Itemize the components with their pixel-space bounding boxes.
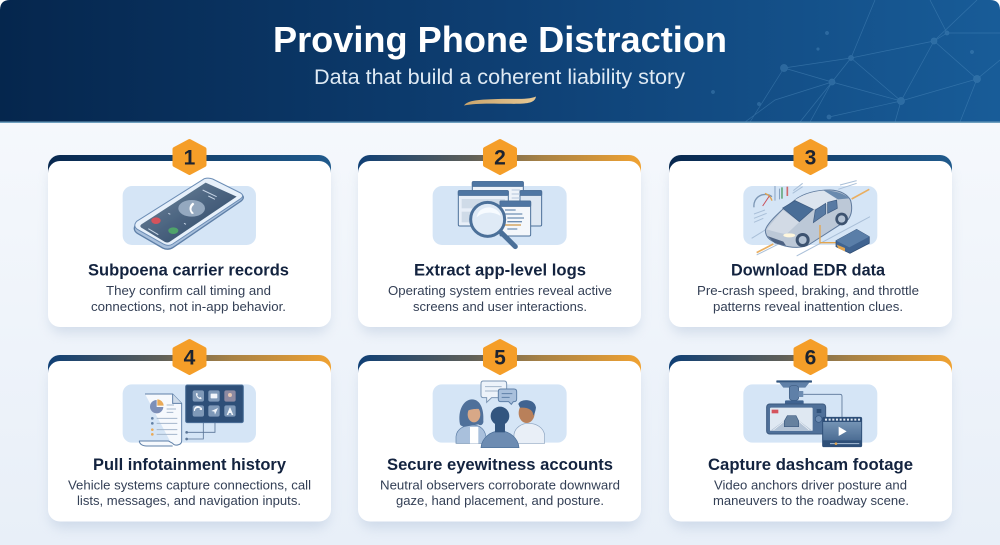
badge 5 (485, 341, 515, 373)
badge 2 (485, 141, 515, 173)
description 6: Video anchors driver posture and (714, 477, 907, 492)
description 6 (713, 477, 909, 508)
heading 5: Secure eyewitness accounts (387, 455, 613, 474)
description 4: lists, messages, and navigation inputs. (77, 493, 301, 508)
description 4 (68, 477, 311, 508)
card 5: secure eyewitness accounts (358, 341, 641, 528)
illustration: document and infotainment screen (123, 384, 256, 446)
description 3: patterns reveal inattention clues. (713, 299, 903, 314)
badge 1: 1 (184, 146, 196, 170)
description 2: screens and user interactions. (413, 299, 587, 314)
description 4: Vehicle systems capture connections, call (68, 477, 311, 492)
illustration: three witnesses (433, 381, 567, 448)
description 2: Operating system entries reveal active (388, 283, 612, 298)
heading 3: Download EDR data (731, 261, 886, 280)
subtitle: Data that build a coherent liability story (314, 66, 686, 89)
description 3: Pre-crash speed, braking, and throttle (697, 283, 919, 298)
illustration: logs and magnifier (433, 182, 567, 247)
description 1: connections, not in-app behavior. (91, 299, 286, 314)
card 4: pull infotainment history (48, 341, 331, 528)
badge 3: 3 (805, 146, 816, 170)
card 6: capture dashcam footage (669, 341, 952, 528)
description 1: They confirm call timing and (106, 283, 271, 298)
heading 6: Capture dashcam footage (708, 455, 913, 474)
badge 5: 5 (494, 346, 506, 370)
badge 4 (174, 341, 204, 373)
gold swoosh (464, 96, 536, 106)
card 3: download EDR data (669, 141, 952, 333)
header banner (0, 0, 1000, 123)
title: Proving Phone Distraction (273, 19, 727, 60)
heading 4: Pull infotainment history (93, 455, 287, 474)
description 5: gaze, hand placement, and posture. (396, 493, 604, 508)
description 5 (380, 477, 620, 508)
badge 6 (796, 341, 826, 373)
description 6: maneuvers to the roadway scene. (713, 493, 909, 508)
network pattern (712, 0, 1000, 122)
illustration: car and EDR module (743, 181, 877, 256)
badge 2: 2 (494, 146, 506, 170)
badge 1 (174, 141, 204, 173)
heading 1: Subpoena carrier records (88, 261, 289, 280)
description 3 (697, 283, 919, 314)
illustration: dashcam and video (743, 380, 877, 447)
heading 2: Extract app-level logs (414, 261, 586, 280)
badge 4: 4 (184, 346, 196, 370)
card 2: extract app-level logs (358, 141, 641, 333)
description 5: Neutral observers corroborate downward (380, 477, 620, 492)
badge 3 (796, 141, 826, 173)
illustration: phone call (123, 178, 256, 249)
description 2 (388, 283, 612, 314)
badge 6: 6 (805, 346, 816, 370)
card 1: subpoena carrier records (48, 141, 331, 333)
description 1 (91, 283, 286, 314)
